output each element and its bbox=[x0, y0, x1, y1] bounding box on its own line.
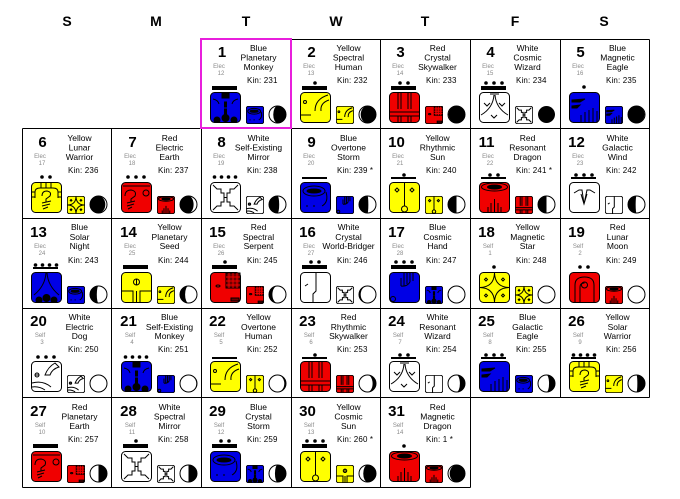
day 26: Solar bbox=[608, 322, 628, 332]
day 7: Electric bbox=[156, 142, 184, 152]
weekday header: T bbox=[242, 13, 251, 29]
day 14: Elec bbox=[124, 244, 136, 250]
day 30: Sun bbox=[341, 421, 356, 431]
day 15: Spectral bbox=[243, 232, 274, 242]
day 15: Red bbox=[251, 222, 267, 232]
day 15: 15 bbox=[209, 224, 226, 241]
day 13: 13 bbox=[30, 224, 47, 241]
day 10: Kin: 240 bbox=[426, 166, 457, 175]
day 28: Spectral bbox=[154, 412, 185, 422]
day 27: Red bbox=[72, 402, 88, 412]
day 16: Elec bbox=[303, 244, 315, 250]
day 14: Planetary bbox=[152, 232, 188, 242]
day 8: Elec bbox=[213, 154, 225, 160]
day 31 bbox=[388, 402, 465, 483]
day 30: 13 bbox=[308, 430, 315, 436]
day 20: Dog bbox=[72, 331, 88, 341]
day 23: Red bbox=[341, 312, 357, 322]
day 8: 19 bbox=[218, 161, 225, 167]
day 17: 17 bbox=[388, 224, 405, 241]
day 5: Magnetic bbox=[600, 52, 635, 62]
day 17: 28 bbox=[397, 251, 404, 257]
day 21: Blue bbox=[161, 312, 178, 322]
day 3 bbox=[390, 43, 465, 124]
day 22: Self bbox=[214, 333, 224, 339]
day 1: Kin: 231 bbox=[247, 76, 278, 85]
day 17 bbox=[388, 222, 465, 304]
day 8: Kin: 238 bbox=[247, 166, 278, 175]
day 11: 22 bbox=[487, 161, 494, 167]
day 25: 25 bbox=[478, 313, 495, 330]
day 21: Self-Existing bbox=[146, 322, 193, 332]
day 19: 2 bbox=[578, 251, 582, 257]
day 8: Self-Existing bbox=[235, 142, 282, 152]
day 27: 10 bbox=[39, 430, 46, 436]
day 7 bbox=[122, 133, 197, 214]
day 7: 18 bbox=[129, 161, 136, 167]
day 12: Galactic bbox=[602, 142, 634, 152]
day 2: Kin: 232 bbox=[337, 76, 368, 85]
day 1: Monkey bbox=[244, 62, 274, 72]
day 25: 8 bbox=[488, 340, 492, 346]
day 29: Storm bbox=[247, 421, 270, 431]
day 18: Yellow bbox=[515, 222, 540, 232]
day 21 bbox=[120, 312, 197, 393]
day 24: Kin: 254 bbox=[426, 345, 457, 354]
day 4: Elec bbox=[482, 64, 494, 70]
day 19: Red bbox=[610, 222, 626, 232]
day 5: Elec bbox=[572, 64, 584, 70]
day 2: Elec bbox=[303, 64, 315, 70]
weekday header bbox=[62, 13, 609, 29]
day 7: Kin: 237 bbox=[158, 166, 189, 175]
day 14: 25 bbox=[129, 251, 136, 257]
day 30: Cosmic bbox=[334, 412, 363, 422]
day 23: 23 bbox=[299, 313, 316, 330]
day 12: Wind bbox=[608, 152, 627, 162]
day 18: 1 bbox=[488, 251, 492, 257]
day 24: 24 bbox=[388, 313, 405, 330]
day 1 bbox=[210, 43, 286, 124]
day 20 bbox=[30, 312, 107, 393]
day 21: Self bbox=[125, 333, 136, 339]
day 6: Elec bbox=[34, 154, 46, 160]
day 27: Kin: 257 bbox=[68, 435, 99, 444]
day 24: Resonant bbox=[419, 322, 456, 332]
day 6: Lunar bbox=[69, 142, 91, 152]
day 13: Kin: 243 bbox=[68, 256, 99, 265]
day 15: 26 bbox=[218, 251, 225, 257]
day 10: 10 bbox=[388, 134, 405, 151]
day 31: Red bbox=[430, 402, 446, 412]
day 27 bbox=[30, 402, 107, 483]
day 14: Kin: 244 bbox=[158, 256, 189, 265]
day 9 bbox=[300, 133, 376, 214]
day 13: Night bbox=[70, 241, 90, 251]
day 7: 7 bbox=[128, 134, 137, 151]
day 24: Self bbox=[393, 333, 404, 339]
day 22: 22 bbox=[209, 313, 226, 330]
day 25 bbox=[478, 312, 555, 393]
day 26: Warrior bbox=[604, 331, 631, 341]
day 18: Self bbox=[483, 244, 494, 250]
day 16: World-Bridger bbox=[322, 241, 375, 251]
day 26: 9 bbox=[578, 340, 582, 346]
day 25: Kin: 255 bbox=[516, 345, 547, 354]
day 25: Eagle bbox=[517, 331, 539, 341]
day 5: 5 bbox=[576, 44, 585, 61]
weekday header: W bbox=[329, 13, 343, 29]
day 29: Crystal bbox=[245, 412, 272, 422]
weekday header: T bbox=[421, 13, 430, 29]
day 3: Skywalker bbox=[418, 62, 457, 72]
day 26: Self bbox=[573, 333, 584, 339]
day 20: Self bbox=[35, 333, 46, 339]
day 6: Kin: 236 bbox=[68, 166, 99, 175]
day 12: Elec bbox=[572, 154, 584, 160]
day 25: Self bbox=[483, 333, 494, 339]
day 16: Kin: 246 bbox=[337, 256, 368, 265]
day 10: Sun bbox=[430, 152, 445, 162]
day 12: White bbox=[607, 133, 629, 143]
day 24 bbox=[388, 312, 465, 393]
day 13: 24 bbox=[39, 251, 46, 257]
day 20: White bbox=[69, 312, 91, 322]
day 5 bbox=[570, 43, 645, 124]
day 25: Blue bbox=[519, 312, 536, 322]
day 23: Rhythmic bbox=[331, 322, 367, 332]
day 19 bbox=[568, 222, 645, 304]
day 4 bbox=[480, 43, 555, 124]
day 10 bbox=[388, 133, 465, 214]
day 28: Kin: 258 bbox=[158, 435, 189, 444]
today highlight box bbox=[201, 39, 291, 128]
day 22: 5 bbox=[219, 340, 223, 346]
day 2: 13 bbox=[308, 71, 315, 77]
day 17: Kin: 247 bbox=[426, 256, 457, 265]
day 5: Eagle bbox=[607, 62, 629, 72]
day 23: Self bbox=[304, 333, 314, 339]
day 15: Serpent bbox=[244, 241, 274, 251]
day 12: 12 bbox=[568, 134, 585, 151]
day 8 bbox=[210, 133, 286, 214]
day 18: Star bbox=[520, 241, 535, 251]
day 10: Yellow bbox=[425, 133, 450, 143]
day 9: Storm bbox=[337, 152, 360, 162]
day 16: 27 bbox=[308, 251, 315, 257]
day 10: 21 bbox=[397, 161, 404, 167]
day 8: Mirror bbox=[247, 152, 270, 162]
day 2 bbox=[300, 43, 376, 124]
day 15 bbox=[209, 222, 286, 304]
weekday header: S bbox=[62, 13, 72, 29]
day 2: 2 bbox=[307, 44, 316, 61]
day 31: Self bbox=[393, 423, 404, 429]
day 30: Yellow bbox=[336, 402, 361, 412]
day 28: White bbox=[159, 402, 181, 412]
day 9: 20 bbox=[308, 161, 315, 167]
day 1: 1 bbox=[218, 44, 226, 61]
day 26: 26 bbox=[568, 313, 585, 330]
day 30 bbox=[299, 402, 376, 483]
day 10: Elec bbox=[392, 154, 404, 160]
day 8: 8 bbox=[217, 134, 226, 151]
day 1: 12 bbox=[218, 71, 225, 77]
day 23: Kin: 253 bbox=[337, 345, 368, 354]
day 12: Kin: 242 bbox=[606, 166, 637, 175]
day 4: 15 bbox=[487, 71, 494, 77]
day 24: Wizard bbox=[424, 331, 451, 341]
day 6: Yellow bbox=[67, 133, 92, 143]
day 13 bbox=[30, 222, 107, 304]
day 29: 12 bbox=[218, 430, 225, 436]
day 3: Red bbox=[430, 43, 446, 53]
day 7: Elec bbox=[124, 154, 136, 160]
day 29 bbox=[209, 402, 286, 483]
day 20: 20 bbox=[30, 313, 47, 330]
day 24: White bbox=[427, 312, 449, 322]
day 7: Red bbox=[162, 133, 178, 143]
day 30: Self bbox=[304, 423, 314, 429]
day 3: Elec bbox=[392, 64, 404, 70]
day 28: 28 bbox=[120, 403, 137, 420]
day 30: Kin: 260 * bbox=[337, 435, 373, 444]
day 22: Yellow bbox=[246, 312, 271, 322]
day 14: 14 bbox=[120, 224, 137, 241]
day 20: Kin: 250 bbox=[68, 345, 99, 354]
day 6: 17 bbox=[39, 161, 46, 167]
day 27: 27 bbox=[30, 403, 47, 420]
day 31: 31 bbox=[388, 403, 405, 420]
day 1: Elec bbox=[213, 64, 225, 70]
day 22: Kin: 252 bbox=[247, 345, 278, 354]
day 31: Magnetic bbox=[420, 412, 455, 422]
day 28: 11 bbox=[129, 430, 136, 436]
day 3: Kin: 233 bbox=[426, 76, 457, 85]
day 18: Magnetic bbox=[510, 232, 545, 242]
day 28: Self bbox=[125, 423, 136, 429]
day 4: 4 bbox=[486, 44, 495, 61]
day 9: Overtone bbox=[331, 142, 366, 152]
day 23: Skywalker bbox=[329, 331, 368, 341]
day 19: Self bbox=[573, 244, 584, 250]
day 22: Overtone bbox=[241, 322, 276, 332]
day 4: Kin: 234 bbox=[516, 76, 547, 85]
day 29: Self bbox=[214, 423, 224, 429]
day 9: Elec bbox=[303, 154, 315, 160]
day 4: White bbox=[517, 43, 539, 53]
day 2: Human bbox=[335, 62, 362, 72]
day 16: 16 bbox=[299, 224, 316, 241]
day 1: Blue bbox=[250, 43, 267, 53]
day 5: Blue bbox=[609, 43, 626, 53]
day 11: Dragon bbox=[514, 152, 542, 162]
day 18: Kin: 248 bbox=[516, 256, 547, 265]
day 11: Elec bbox=[482, 154, 494, 160]
day 3: 14 bbox=[397, 71, 404, 77]
weekday header: F bbox=[511, 13, 520, 29]
day 20: Electric bbox=[66, 322, 94, 332]
day 1: Planetary bbox=[241, 52, 277, 62]
day 13: Solar bbox=[70, 232, 90, 242]
day 22 bbox=[209, 312, 286, 393]
day 4: Wizard bbox=[514, 62, 541, 72]
day 19: Lunar bbox=[607, 232, 629, 242]
day 29: Kin: 259 bbox=[247, 435, 278, 444]
day 2: Yellow bbox=[336, 43, 361, 53]
day 14: Seed bbox=[160, 241, 180, 251]
day 10: Rhythmic bbox=[420, 142, 456, 152]
day 26: Kin: 256 bbox=[606, 345, 637, 354]
day 21: 21 bbox=[120, 313, 137, 330]
day 25: Galactic bbox=[512, 322, 544, 332]
day 6: Warrior bbox=[66, 152, 93, 162]
day 18 bbox=[478, 222, 555, 304]
day 6 bbox=[32, 133, 107, 214]
day 17: Elec bbox=[392, 244, 404, 250]
day 7: Earth bbox=[159, 152, 180, 162]
day 19: Kin: 249 bbox=[606, 256, 637, 265]
day 11: Resonant bbox=[509, 142, 546, 152]
day 27: Planetary bbox=[62, 412, 98, 422]
day 12 bbox=[568, 133, 645, 214]
day 29: 29 bbox=[209, 403, 226, 420]
day 17: Hand bbox=[427, 241, 448, 251]
day 3: Crystal bbox=[424, 52, 451, 62]
day 18: 18 bbox=[478, 224, 495, 241]
day 31: Dragon bbox=[424, 421, 452, 431]
day 16: Crystal bbox=[335, 232, 362, 242]
day 23: 6 bbox=[309, 340, 313, 346]
day 29: Blue bbox=[250, 402, 267, 412]
day 4: Cosmic bbox=[513, 52, 542, 62]
day 21: 4 bbox=[130, 340, 134, 346]
day 28 bbox=[120, 402, 197, 483]
day 9: Blue bbox=[340, 133, 357, 143]
day 5: 16 bbox=[577, 71, 584, 77]
day 20: 3 bbox=[40, 340, 44, 346]
day 19: 19 bbox=[568, 224, 585, 241]
day 11: Red bbox=[520, 133, 536, 143]
weekday header: M bbox=[150, 13, 162, 29]
day 11: 11 bbox=[479, 134, 494, 151]
day 31: 14 bbox=[397, 430, 404, 436]
day 11 bbox=[479, 133, 555, 214]
day 14: Yellow bbox=[157, 222, 182, 232]
day 17: Cosmic bbox=[423, 232, 452, 242]
day 3: 3 bbox=[396, 44, 405, 61]
day 21: Monkey bbox=[155, 331, 185, 341]
day 5: Kin: 235 bbox=[606, 76, 637, 85]
day 30: 30 bbox=[299, 403, 316, 420]
day 27: Self bbox=[35, 423, 46, 429]
day 15: Elec bbox=[213, 244, 225, 250]
day 16: White bbox=[338, 222, 360, 232]
day 8: White bbox=[248, 133, 270, 143]
day 24: 7 bbox=[398, 340, 402, 346]
day 19: Moon bbox=[607, 241, 628, 251]
day 13: Blue bbox=[71, 222, 88, 232]
day 17: Blue bbox=[429, 222, 446, 232]
day 15: Kin: 245 bbox=[247, 256, 278, 265]
day 21: Kin: 251 bbox=[158, 345, 189, 354]
day 28: Mirror bbox=[158, 421, 181, 431]
day 31: Kin: 1 * bbox=[426, 435, 453, 444]
day 13: Elec bbox=[34, 244, 46, 250]
day 26 bbox=[568, 312, 645, 393]
day 23 bbox=[299, 312, 376, 393]
day 14 bbox=[120, 222, 197, 304]
day 2: Spectral bbox=[333, 52, 364, 62]
day 9: Kin: 239 * bbox=[337, 166, 373, 175]
day 6: 6 bbox=[38, 134, 47, 151]
day 16 bbox=[299, 222, 376, 304]
day 11: Kin: 241 * bbox=[516, 166, 552, 175]
day 27: Earth bbox=[69, 421, 90, 431]
day 12: 23 bbox=[577, 161, 584, 167]
day 26: Yellow bbox=[605, 312, 630, 322]
day 9: 9 bbox=[307, 134, 316, 151]
weekday header: S bbox=[599, 13, 609, 29]
day 22: Human bbox=[245, 331, 272, 341]
